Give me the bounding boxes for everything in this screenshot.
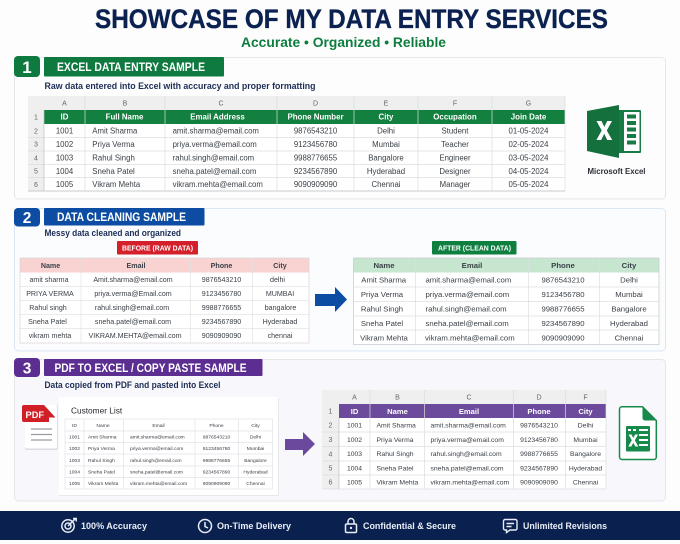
section number 1 [14,56,40,77]
table: after clean data: 9123456780 [541,290,585,299]
table: after clean data: Chennai [615,333,644,342]
table: customer list [65,419,272,489]
table: pasted excel sheet: 3 [329,437,333,444]
table: before raw data [20,258,309,343]
table: customer list: 1004 [69,470,80,476]
table: excel sample: 1 [34,114,38,121]
table: after clean data: Amit Sharma [361,276,407,285]
badge: confidential and secure [346,518,456,532]
table: customer list: 9234567890 [203,470,230,476]
table: pasted excel sheet: 9876543210 [520,422,558,430]
table: after clean data: Phone [551,261,576,270]
table: pasted excel sheet: 1 [329,408,333,416]
table: after clean data: sneha.patel@email.com [426,319,509,328]
table: pasted excel sheet: 2 [329,422,333,430]
table: customer list: Delhi [250,434,261,440]
table: pasted excel sheet [322,390,606,489]
table: excel sample: Rahul Singh [92,154,135,162]
panel: excel data entry sample [14,56,666,199]
table: pasted excel sheet: vikram.mehta@email.com [430,480,510,486]
table: excel sample: vikram.mehta@email.com [173,180,263,189]
table: customer list: vikram.mehta@email.com [130,481,187,487]
table: after clean data: Name [373,261,395,270]
table: pasted excel sheet: Mumbai [573,437,598,444]
panel: pdf to excel copy paste sample [14,358,666,501]
table: after clean data: Priya Verma [361,290,404,299]
section number 3 [14,358,40,378]
table: pasted excel sheet: 9234567890 [520,466,558,472]
table: after clean data: Sneha Patel [361,319,403,328]
table: excel sample: C [218,100,224,107]
table: pasted excel sheet: 1004 [347,466,362,472]
table: pasted excel sheet: Email [459,407,479,416]
table: excel sample: 9090909090 [294,180,338,189]
card: customer list [59,397,279,496]
table: pasted excel sheet: 1001 [347,422,362,430]
table: customer list: Email [152,423,165,429]
table: excel sample: Phone Number [287,113,344,122]
table: excel sample: 1005 [56,180,74,189]
table: customer list: 1002 [69,446,80,452]
table: excel sample: Email Address [190,113,245,122]
table: before raw data: rahul.singh@email.com [95,304,169,312]
section number 2: 2 [23,210,31,227]
table: after clean data: Vikram Mehta [360,333,409,342]
table: after clean data: City [622,261,637,270]
table: after clean data: priya.verma@email.com [426,290,509,299]
badge: unlimited revisions [504,520,607,532]
table: excel sample: E [384,100,389,107]
table: pasted excel sheet: 9090909090 [520,480,558,486]
table: pasted excel sheet: B [395,394,400,401]
panel: data cleaning sample [14,208,666,351]
table: pasted excel sheet: 9123456780 [520,437,558,444]
badge: 100% accuracy [62,518,148,532]
arrow: pdf to excel [285,432,315,456]
table: before raw data: MUMBAI [266,290,294,298]
table: excel sample: 5 [34,169,38,176]
table: pasted excel sheet: 1002 [347,437,362,444]
table: excel sample: A [62,100,67,107]
table: after clean data: Mumbai [615,290,643,299]
table: customer list: City [251,423,260,429]
table: excel sample: Priya Verma [92,140,135,149]
table: excel sample: 1003 [56,154,73,162]
table: excel sample: Occupation [433,113,477,122]
table: excel sample: 02-05-2024 [509,140,549,149]
table: before raw data: Sneha Patel [28,318,67,326]
table: excel sample: D [313,100,318,107]
table: excel sample: F [453,100,457,107]
table: customer list: Amit Sharma [88,434,117,440]
table: excel sample: 2 [34,128,38,135]
table: pasted excel sheet: 1005 [347,480,362,486]
badge: on-time delivery: On-Time Delivery [217,521,292,532]
table: customer list: priya.verma@email.com [130,446,183,452]
table: pasted excel sheet: Vikram Mehta [376,480,419,486]
table: excel sample: Amit Sharma [92,126,138,136]
table: pasted excel sheet: 1003 [347,451,362,458]
table: after clean data: Email [462,261,482,270]
table: pasted excel sheet: 5 [329,466,333,472]
table: pasted excel sheet: 4 [329,451,333,458]
section description 2: Messy data cleaned and organized [44,227,181,238]
table: before raw data: Hyderabad [263,318,297,326]
table: excel sample: rahul.singh@email.com [173,154,254,162]
table: before raw data: amit sharma [29,276,69,284]
table: pasted excel sheet: Rahul Singh [376,451,414,458]
subtitle: Accurate • Organized • Reliable [241,35,446,50]
table: pasted excel sheet: City [578,407,593,416]
table: customer list: 1003 [69,458,80,464]
table: excel sample: Manager [440,180,471,189]
badge: unlimited revisions: Unlimited Revisions [523,521,607,532]
table: excel sample: Delhi [377,126,395,136]
table: excel sample: Designer [439,167,471,176]
table: before raw data: delhi [270,276,285,284]
table: before raw data: vikram mehta [29,332,71,340]
table: excel sample: Chennai [371,180,401,189]
table: excel sample: 9234567890 [294,167,338,176]
table: customer list: Hyderabad [243,470,268,476]
table: customer list: ID [72,423,77,429]
table: after clean data: amit.sharma@email.com [426,276,511,285]
table: excel sample: sneha.patel@email.com [173,167,256,176]
table: customer list: sneha.patel@email.com [130,470,183,476]
table: customer list: Vikram Mehta [88,481,119,487]
table: excel sample: priya.verma@email.com [173,140,257,149]
table: before raw data: PRIYA VERMA [26,290,74,298]
table: before raw data: 9876543210 [202,276,241,284]
table: before raw data: Email [127,262,145,270]
table: after clean data: Hyderabad [610,319,648,328]
table: customer list: 9123456780 [203,446,230,452]
table: after clean data: vikram.mehta@email.com [425,333,515,342]
table: customer list: 9090909090 [203,481,230,487]
heading: customer list: Customer List [71,406,123,416]
section heading 1 [44,57,224,76]
table: excel sample: City [379,113,394,122]
table: after clean data [354,258,659,344]
table: pasted excel sheet: amit.sharma@email.com [430,422,506,430]
table: excel sample: Sneha Patel [92,167,135,176]
table: customer list: Rahul Singh [88,458,115,464]
table: excel sample: Join Date [511,113,547,122]
table: pasted excel sheet: 6 [329,480,333,487]
label: after clean data [432,241,516,254]
table: excel sample: 05-05-2024 [509,180,549,189]
table: pasted excel sheet: D [536,394,542,401]
table: after clean data: Bangalore [611,305,647,314]
section number 1: 1 [22,58,32,77]
table: before raw data: sneha.patel@email.com [95,318,171,326]
icon: excel file [620,407,656,460]
table: excel sample: 01-05-2024 [509,126,549,136]
table: excel sample [28,96,565,191]
label: microsoft excel: Microsoft Excel [588,167,646,176]
table: pasted excel sheet: priya.verma@email.com [430,437,504,444]
table: before raw data: bangalore [265,304,296,312]
table: pasted excel sheet: Chennai [573,480,599,486]
table: before raw data: Amit.sharma@email.com [93,276,173,284]
section number 3: 3 [23,360,32,378]
table: excel sample: G [526,100,531,107]
table: before raw data: 9123456780 [202,290,241,298]
table: excel sample: ID [61,113,69,122]
table: excel sample: 3 [34,142,38,149]
table: excel sample: amit.sharma@email.com [173,126,259,136]
table: excel sample: 6 [34,182,38,189]
table: excel sample: 4 [34,155,38,162]
table: before raw data: VIKRAM.MEHTA@email.com [88,332,182,340]
table: pasted excel sheet: Priya Verma [376,437,414,444]
table: excel sample: 1001 [56,126,73,136]
table: customer list: Mumbai [247,446,264,452]
label: after clean data: AFTER (CLEAN DATA) [438,246,511,252]
table: after clean data: Rahul Singh [361,305,403,314]
table: customer list: rahul.singh@email.com [130,458,182,464]
icon: pdf document [22,405,58,450]
table: customer list: 9988776655 [203,458,230,464]
table: pasted excel sheet: C [466,394,472,401]
table: customer list: Phone [209,423,224,429]
label: before raw data: BEFORE (RAW DATA) [122,246,193,252]
icon: pdf document: PDF [26,410,44,420]
table: after clean data: 9234567890 [541,319,585,328]
table: pasted excel sheet: Bangalore [570,451,601,458]
table: excel sample: 03-05-2024 [509,154,549,162]
table: pasted excel sheet: Phone [527,407,551,416]
section heading 2 [44,208,204,226]
section heading 1: EXCEL DATA ENTRY SAMPLE [57,61,205,74]
table: before raw data: Phone [211,262,232,270]
table: excel sample: Student [442,126,469,136]
table: after clean data: rahul.singh@email.com [426,305,507,314]
table: customer list: amit.sharma@email.com [130,434,185,440]
table: excel sample: 9123456780 [294,140,338,149]
table: before raw data: 9988776655 [202,304,241,312]
table: excel sample: Full Name [106,113,144,122]
arrow: before to after [315,287,347,312]
badge: confidential and secure: Confidential & Secure [363,521,456,532]
section heading 3: PDF TO EXCEL / COPY PASTE SAMPLE [54,362,247,375]
table: excel sample: 9988776655 [294,154,338,162]
table: customer list: 1005 [69,481,80,487]
title: SHOWCASE OF MY DATA ENTRY SERVICES [95,4,608,34]
table: before raw data: 9234567890 [202,318,241,326]
table: pasted excel sheet: Amit Sharma [376,422,416,430]
table: excel sample: Engineer [439,154,471,162]
label: before raw data [117,241,198,254]
table: before raw data: City [273,262,287,270]
table: excel sample: 1002 [56,140,73,149]
table: before raw data: Name [41,262,60,270]
table: before raw data: priya.verma@Email.com [94,290,172,298]
table: pasted excel sheet: sneha.patel@email.com [430,466,504,472]
table: excel sample: 04-05-2024 [509,167,549,176]
table: excel sample: Teacher [441,140,469,149]
section description 3: Data copied from PDF and pasted into Excel [44,379,220,390]
table: after clean data: 9876543210 [541,276,585,285]
table: pasted excel sheet: A [352,394,357,401]
section description 1: Raw data entered into Excel with accuracy and proper formatting [44,80,316,91]
table: excel sample: Bangalore [368,154,404,162]
table: pasted excel sheet: rahul.singh@email.com [430,451,502,458]
table: customer list: Bangalore [244,458,267,464]
table: pasted excel sheet: Hyderabad [569,466,602,472]
table: excel sample: B [123,100,128,107]
table: pasted excel sheet: ID [351,407,359,416]
section number 2 [14,208,40,227]
badge: on-time delivery [198,520,292,532]
badge: 100% accuracy: 100% Accuracy [81,521,148,532]
table: after clean data: 9090909090 [541,333,585,342]
icon: microsoft excel logo [587,105,641,158]
table: pasted excel sheet: 9988776655 [520,451,558,458]
table: customer list: 9876543210 [203,434,230,440]
table: customer list: Name [96,423,110,429]
table: excel sample: 1004 [56,167,74,176]
table: customer list: 1001 [69,434,80,440]
table: excel sample: Vikram Mehta [92,180,141,189]
table: customer list: Priya Verma [88,446,115,452]
table: pasted excel sheet: Name [387,407,408,416]
table: before raw data: chennai [268,332,293,340]
table: pasted excel sheet: Delhi [578,422,594,430]
footer bar [0,511,680,540]
table: pasted excel sheet: Sneha Patel [376,466,414,472]
table: customer list: Chennai [246,481,265,487]
table: excel sample: Hyderabad [367,167,405,176]
table: after clean data: 9988776655 [541,305,585,314]
table: customer list: Sneha Patel [88,470,115,476]
table: excel sample: 9876543210 [294,126,338,136]
section heading 2: DATA CLEANING SAMPLE [57,211,186,224]
table: before raw data: 9090909090 [202,332,241,340]
table: excel sample: Mumbai [372,140,400,149]
table: pasted excel sheet: F [583,394,588,401]
table: after clean data: Delhi [620,276,638,285]
table: before raw data: Rahul singh [29,304,67,312]
